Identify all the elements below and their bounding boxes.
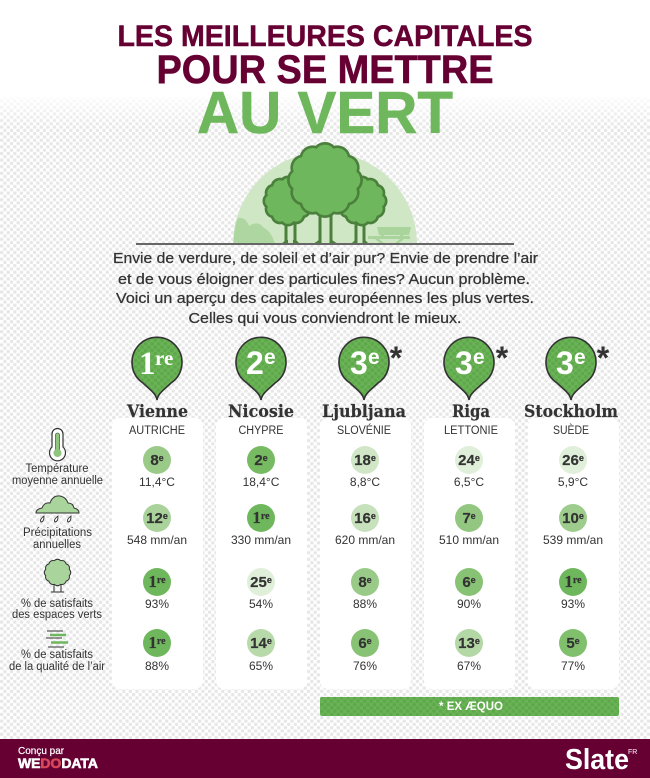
air quality rank: 14 — [250, 635, 267, 652]
rain rank: e — [471, 511, 476, 521]
title — [118, 20, 532, 146]
temperature rank: 8 — [150, 452, 159, 469]
intro text: Voici un aperçu des capitales européennes les plus vertes. — [116, 291, 534, 307]
title: AU VERT — [197, 80, 453, 146]
intro text: Envie de verdure, de soleil et d’air pur? Envie de prendre l’air — [113, 251, 538, 267]
icon: tree — [44, 559, 71, 592]
rank pin: 2e: e — [264, 346, 276, 369]
air quality rank: 65% — [249, 659, 273, 673]
rank pin: 3e ex aequo: e — [368, 346, 380, 369]
city name: Stockholm — [524, 402, 618, 422]
air quality rank: e — [367, 636, 372, 646]
icon: thermometer — [50, 429, 66, 461]
rank pin: 3e ex aequo: e — [574, 346, 586, 369]
rank pin: 1re — [132, 337, 182, 400]
green spaces rank: 8 — [358, 574, 367, 591]
green spaces rank — [143, 568, 171, 611]
air quality rank — [559, 629, 587, 673]
intro text — [113, 251, 538, 327]
rank pin: 3e ex aequo: 3 — [350, 345, 368, 381]
temperature rank — [558, 446, 588, 489]
rain rank: 12 — [146, 510, 163, 527]
ex aequo note: * EX ÆQUO — [439, 701, 503, 713]
rain rank: 510 mm/an — [439, 533, 499, 547]
panel: Stockholm — [524, 337, 619, 689]
rank pin: 3e ex aequo — [444, 337, 509, 400]
rain rank: e — [579, 511, 584, 521]
rain rank — [439, 504, 499, 547]
credit: WeDoData: WEDODATA — [18, 756, 98, 771]
city name: Nicosie — [228, 402, 294, 422]
rank pin: 3e ex aequo: * — [496, 340, 509, 376]
title: POUR SE METTRE — [156, 48, 494, 92]
air quality rank: e — [267, 636, 272, 646]
row label: temperature: Température — [26, 463, 88, 475]
temperature rank: 8,8°C — [350, 475, 380, 489]
city name: Vienne — [126, 402, 188, 422]
temperature rank — [454, 446, 484, 489]
rank pin: 3e ex aequo: * — [390, 340, 403, 376]
country: AUTRICHE — [129, 425, 185, 437]
row label: air quality — [9, 631, 105, 673]
green spaces rank — [559, 568, 587, 611]
green spaces rank: 54% — [249, 597, 273, 611]
green spaces rank: 93% — [561, 597, 585, 611]
temperature rank: 24 — [458, 452, 475, 469]
row label: temperature — [12, 429, 103, 487]
rain rank: 620 mm/an — [335, 533, 395, 547]
illustration: trees and bench in a park — [136, 143, 514, 245]
rain rank — [543, 504, 603, 547]
temperature rank: e — [159, 453, 164, 463]
row label: rainfall — [23, 496, 92, 551]
icon: air lines — [46, 631, 68, 647]
rank pin: 3e ex aequo: 3 — [556, 345, 574, 381]
temperature rank: 6,5°C — [454, 475, 484, 489]
green spaces rank: 1 — [564, 572, 573, 591]
air quality rank: 13 — [458, 635, 475, 652]
air quality rank: 6 — [358, 635, 367, 652]
temperature rank: 2 — [254, 452, 263, 469]
air quality rank: e — [475, 636, 480, 646]
rank pin: 3e ex aequo — [546, 337, 610, 400]
rank pin: 3e ex aequo: 3 — [455, 345, 473, 381]
air quality rank — [143, 629, 171, 673]
credit: WeDoData: Conçu par — [18, 746, 65, 757]
air quality rank: 5 — [566, 635, 575, 652]
row label: green spaces — [12, 559, 102, 621]
country: SLOVÉNIE — [337, 424, 391, 437]
panel: Riga — [424, 337, 515, 689]
green spaces rank: 1 — [148, 572, 157, 591]
air quality rank: 1 — [148, 633, 157, 652]
green spaces rank: e — [267, 575, 272, 585]
air quality rank: 67% — [457, 659, 481, 673]
rain rank: re — [261, 511, 270, 522]
country: SUÈDE — [553, 424, 589, 437]
green spaces rank: 90% — [457, 597, 481, 611]
temperature rank: 5,9°C — [558, 475, 588, 489]
temperature rank — [350, 446, 380, 489]
rank pin: 3e ex aequo: * — [597, 340, 610, 376]
green spaces rank: re — [573, 575, 582, 586]
rain rank: 548 mm/an — [127, 533, 187, 547]
air quality rank — [455, 629, 483, 673]
row label: green spaces: des espaces verts — [12, 609, 102, 621]
panel: Nicosie — [216, 337, 307, 689]
temperature rank: e — [475, 453, 480, 463]
green spaces rank: 25 — [250, 574, 267, 591]
rank pin: 2e: 2 — [246, 345, 264, 381]
rank pin: 3e ex aequo — [339, 337, 403, 400]
credit: WeDoData — [18, 746, 98, 771]
rank pin: 1re: 1 — [139, 346, 156, 382]
green spaces rank: 93% — [145, 597, 169, 611]
air quality rank: 77% — [561, 659, 585, 673]
logo: Slate: FR — [628, 749, 637, 756]
rain rank: 1 — [252, 508, 261, 527]
temperature rank: 26 — [562, 452, 579, 469]
temperature rank: 11,4°C — [139, 475, 175, 489]
footer — [0, 739, 650, 778]
air quality rank — [247, 629, 275, 673]
temperature rank: e — [263, 453, 268, 463]
panel: Ljubljana — [320, 337, 411, 689]
intro text: Celles qui vous conviendront le mieux. — [188, 311, 462, 327]
air quality rank — [351, 629, 379, 673]
rain rank — [231, 504, 291, 547]
air quality rank: 76% — [353, 659, 377, 673]
row label: air quality: de la qualité de l’air — [9, 661, 105, 673]
rain rank — [127, 504, 187, 547]
panel: Vienne — [112, 337, 203, 689]
green spaces rank: 6 — [462, 574, 471, 591]
intro text: et de vous éloigner des particules fines? Aucun problème. — [118, 272, 530, 288]
temperature rank: e — [371, 453, 376, 463]
country: LETTONIE — [444, 425, 498, 437]
rain rank: 10 — [562, 510, 579, 527]
temperature rank — [243, 446, 280, 489]
rain rank: e — [163, 511, 168, 521]
row label: green spaces: % de satisfaits — [21, 598, 93, 610]
temperature rank — [139, 446, 175, 489]
rain rank: 330 mm/an — [231, 533, 291, 547]
green spaces rank — [247, 568, 275, 611]
rank pin: 2e — [236, 337, 286, 400]
green spaces rank: e — [367, 575, 372, 585]
air quality rank: 88% — [145, 659, 169, 673]
air quality rank: e — [575, 636, 580, 646]
title: LES MEILLEURES CAPITALES — [118, 20, 532, 53]
air quality rank: re — [157, 636, 166, 647]
city name: Riga — [452, 402, 490, 422]
rain rank: 16 — [354, 510, 371, 527]
rain rank: 539 mm/an — [543, 533, 603, 547]
rain rank — [335, 504, 395, 547]
country: CHYPRE — [238, 425, 284, 437]
temperature rank: e — [579, 453, 584, 463]
city name: Ljubljana — [322, 402, 406, 422]
icon: rain cloud — [36, 496, 79, 522]
row label: rainfall: Précipitations — [23, 527, 92, 539]
green spaces rank — [351, 568, 379, 611]
green spaces rank — [455, 568, 483, 611]
rank pin: 1re: re — [155, 346, 173, 370]
green spaces rank: re — [157, 575, 166, 586]
row label: air quality: % de satisfaits — [21, 649, 93, 661]
row label: temperature: moyenne annuelle — [12, 475, 103, 487]
green spaces rank: 88% — [353, 597, 377, 611]
row label: rainfall: annuelles — [33, 539, 81, 551]
logo: Slate: Slate — [565, 744, 629, 776]
temperature rank: 18 — [354, 452, 371, 469]
rain rank: e — [371, 511, 376, 521]
temperature rank: 18,4°C — [243, 475, 280, 489]
ex aequo note — [320, 697, 619, 716]
green spaces rank: e — [471, 575, 476, 585]
rank pin: 3e ex aequo: e — [473, 346, 485, 369]
rain rank: 7 — [462, 510, 471, 527]
